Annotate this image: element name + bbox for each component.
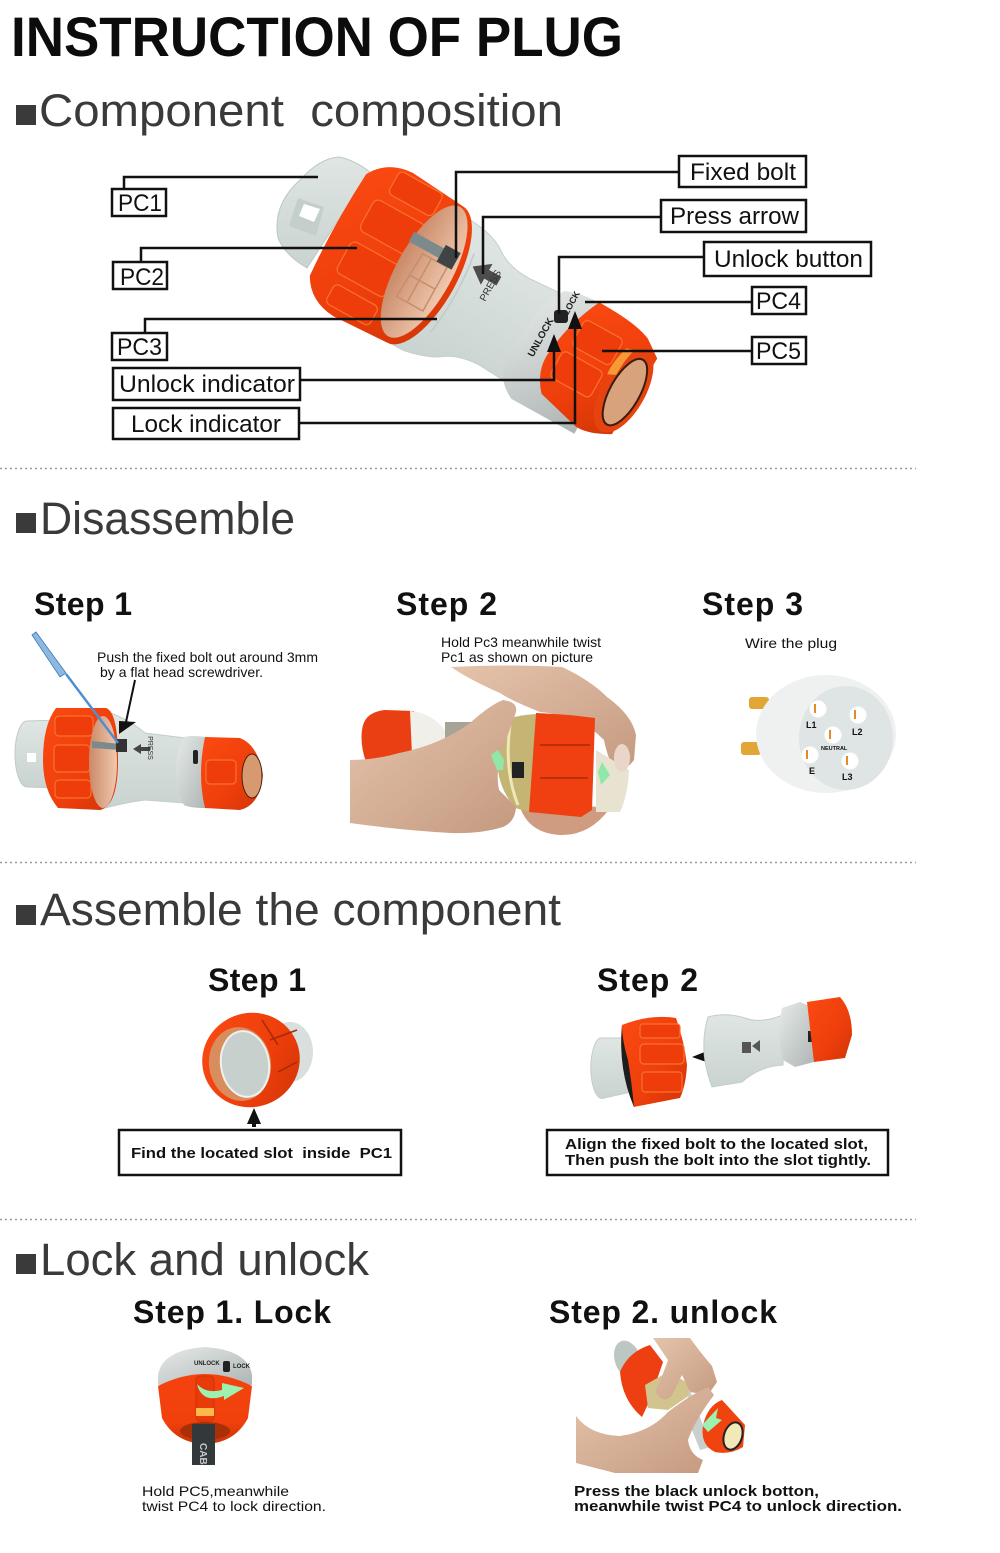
illustration: PC1 collar with slot [189,999,313,1127]
illustration: plug with screwdriver: PRESS [146,736,153,760]
terminal labels: L3 [842,772,853,782]
PC1 tube [277,157,371,268]
assemble step 2 heading: Step 2 [597,962,698,998]
instruction: push fixed bolt: Push the fixed bolt out around 3mm [97,649,318,665]
label: PC4: PC4 [756,288,801,315]
assemble step 1 heading: Step 1 [208,962,306,998]
label: PC1: PC1 [118,190,162,217]
terminal labels: E [809,766,815,776]
illustration: lock cap [158,1347,252,1471]
caption box: align bolt: Align the fixed bolt to the located slot, [565,1136,868,1153]
instruction: unlock: meanwhile twist PC4 to unlock direction. [574,1498,902,1515]
instruction: hold Pc3: Hold Pc3 meanwhile twist [441,634,601,650]
illustration: lock cap: UNLOCK [194,1361,220,1367]
label: unlock button: Unlock button [714,246,863,273]
leader lines [124,172,752,423]
illustration: plug with screwdriver [15,632,263,810]
disassemble step 1 heading: Step 1 [34,586,132,622]
instruction: unlock: Press the black unlock botton, [574,1483,819,1500]
instruction: wire the plug: Wire the plug [745,635,837,651]
illustration: wiring module [741,675,896,793]
green direction arrow [197,1383,244,1400]
instruction: push fixed bolt [97,649,318,680]
indicator arrowheads [547,311,582,352]
arrow left [692,1049,714,1064]
instruction: lock: Hold PC5,meanwhile [142,1483,289,1499]
arrow up [247,1108,261,1127]
label: PC2: PC2 [120,264,164,291]
label: unlock indicator: Unlock indicator [119,371,295,398]
heading: component composition: Component composition [39,85,563,136]
heading: disassemble: Disassemble [40,493,295,544]
caption box: find slot [119,1130,401,1175]
peach inner view [364,193,484,350]
plug body rotated along axis: LOCK [561,289,582,317]
terminal labels: NEUTRAL [821,746,848,752]
lock step heading: Step 1. Lock [133,1294,331,1330]
label: press arrow: Press arrow [670,203,800,230]
label: fixed bolt: Fixed bolt [690,159,796,186]
terminals [802,700,866,770]
disassemble step 2 heading: Step 2 [396,586,497,622]
plug body rotated along axis: UNLOCK [526,316,557,359]
photo: hands unlocking [576,1337,746,1473]
PC3 body [386,211,570,403]
illustration: align bolt [591,997,852,1107]
heading: lock and unlock: Lock and unlock [40,1234,370,1285]
heading: assemble the component: Assemble the component [40,884,562,935]
instruction: hold Pc3: Pc1 as shown on picture [441,649,593,665]
screwdriver [66,674,118,743]
plug body rotated along axis [296,152,686,467]
fixed bolt strap [409,232,453,263]
arrow to bolt [126,680,135,722]
label: lock indicator: Lock indicator [131,411,281,438]
PC4 grey collar [491,277,636,434]
disassemble step 3 heading: Step 3 [702,586,803,622]
instruction: hold Pc3 [441,634,601,665]
unlock step heading: Step 2. unlock [549,1294,777,1330]
title: INSTRUCTION OF PLUG [11,5,623,68]
terminal labels [806,720,863,782]
label: unlock button [704,242,871,276]
PC2 collar [296,152,493,361]
label: lock indicator [113,408,299,439]
press arrow [467,256,505,292]
label: PC3: PC3 [117,334,162,361]
fixed bolt [437,245,461,270]
caption box: find slot: Find the located slot inside PC1 [131,1145,392,1162]
PC5 cap [523,293,667,445]
diagram: plug components [124,152,752,467]
unlock button [554,310,568,323]
instruction: lock: twist PC4 to lock direction. [142,1498,326,1514]
illustration: lock cap: LOCK [233,1364,251,1370]
caption box: align bolt: Then push the bolt into the slot tightly. [565,1152,871,1169]
caption box: align bolt [547,1130,888,1175]
photo: hands twisting plug [350,666,636,835]
instruction: push fixed bolt: by a flat head screwdriver. [100,664,263,680]
PC5 lens [582,338,666,442]
terminal labels: L2 [852,727,863,737]
illustration: lock cap: CABL [197,1443,208,1471]
plug body rotated along axis: PRESS [478,268,504,303]
label: PC5: PC5 [756,338,801,365]
terminal labels: L1 [806,720,817,730]
instruction: lock [142,1483,326,1514]
instruction: unlock [574,1483,902,1515]
